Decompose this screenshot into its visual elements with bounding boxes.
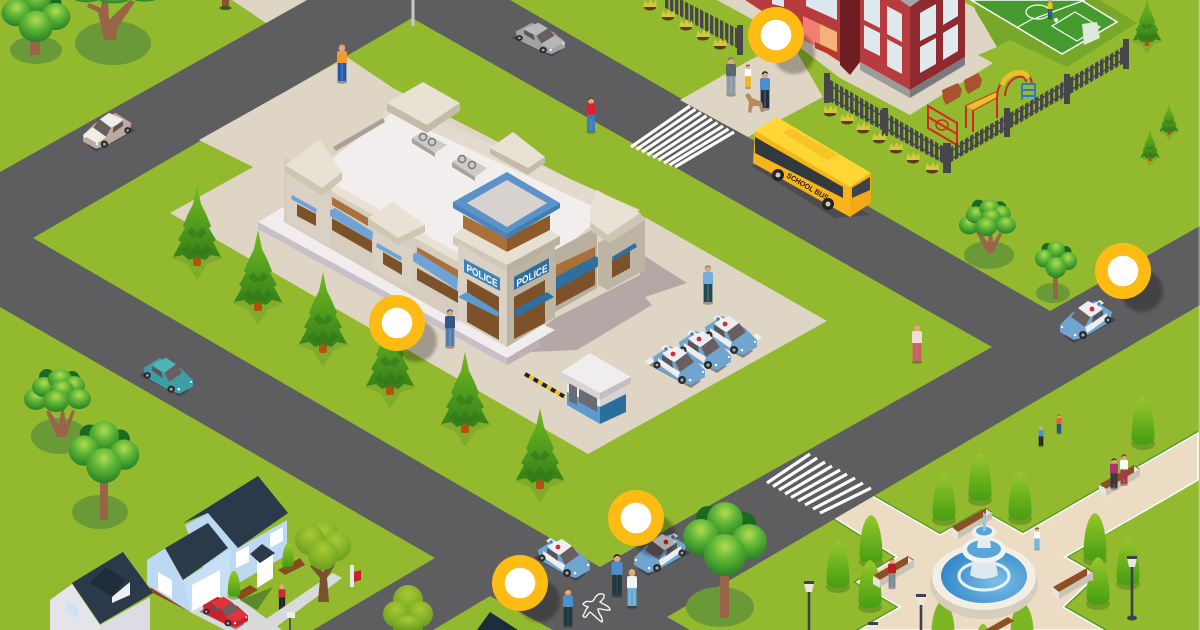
roof (323, 113, 605, 258)
round tree B (69, 421, 139, 529)
house blue (145, 476, 288, 612)
corner roof (477, 612, 518, 630)
left pier (287, 170, 330, 246)
round tree D (1035, 241, 1077, 303)
round trees top left (2, 0, 161, 65)
wall windows and awnings (325, 197, 458, 303)
marker: crime scene upper (608, 490, 676, 557)
police car scene left (534, 538, 590, 581)
small pines right (1131, 0, 1179, 167)
round tree A (24, 369, 91, 454)
police sign left (464, 259, 500, 291)
marker: school (748, 7, 815, 74)
soil (147, 585, 198, 612)
pine tree row (171, 185, 566, 503)
building shadow (507, 253, 687, 355)
police dog (745, 93, 764, 113)
fences (664, 0, 1129, 173)
flower beds (643, 0, 939, 174)
plinth (258, 205, 555, 365)
teal car (140, 358, 193, 397)
front wall (284, 157, 458, 322)
houses (47, 476, 518, 630)
police sign right: POLICE (516, 262, 548, 290)
parking pad (645, 333, 762, 383)
right pier (598, 217, 645, 290)
upper left sidewalk (232, 0, 307, 23)
park lamps (804, 556, 1137, 630)
benches and playground (928, 71, 1035, 145)
police station lot (170, 57, 827, 454)
street cars (83, 23, 1116, 581)
right wall (555, 227, 597, 312)
police car scene right (634, 533, 690, 576)
marker: police station (369, 295, 437, 362)
crosswalk: north (631, 106, 734, 167)
light green trees (295, 520, 433, 630)
police sign left: POLICE (466, 263, 498, 290)
round tree C (959, 200, 1016, 269)
police car right road (1060, 300, 1116, 343)
school bus: SCHOOL BUS (785, 171, 830, 202)
silver car (512, 23, 565, 56)
back parapet (380, 100, 640, 232)
people (278, 44, 1062, 628)
road centre block grass (33, 18, 992, 567)
barrier arm (525, 374, 565, 397)
crosswalk: south (767, 454, 871, 513)
school building (745, 0, 965, 98)
marker: right road (1095, 243, 1163, 312)
chalk outline (583, 594, 610, 622)
small trunk top (220, 0, 232, 10)
parked police car 1 (649, 345, 705, 388)
benches (873, 465, 1140, 630)
tower (453, 172, 560, 347)
driveway and walkway (190, 592, 282, 630)
red car (199, 597, 248, 630)
park cone trees (826, 397, 1155, 630)
police station (258, 82, 645, 365)
round tree scene (683, 502, 767, 627)
back caps (387, 82, 460, 125)
soccer players (1048, 0, 1052, 19)
parked police car 2 (675, 330, 731, 373)
school bus (750, 117, 871, 218)
street lamp top (412, 0, 414, 26)
AC units (412, 132, 447, 157)
park paths (835, 433, 1198, 630)
fountain (930, 512, 1038, 619)
mid pier (373, 226, 413, 290)
school windows (864, 0, 958, 74)
parked police car 3 (701, 315, 757, 358)
for sale sign (350, 565, 361, 587)
gate booth (561, 353, 631, 424)
school plaza (680, 40, 823, 137)
soccer field (971, 0, 1137, 67)
small hedge cones (227, 543, 294, 600)
white car (83, 113, 135, 152)
house white (47, 552, 153, 630)
park visitors (888, 454, 1128, 589)
marker: crime scene lower (492, 555, 560, 622)
mailbox (287, 612, 295, 630)
